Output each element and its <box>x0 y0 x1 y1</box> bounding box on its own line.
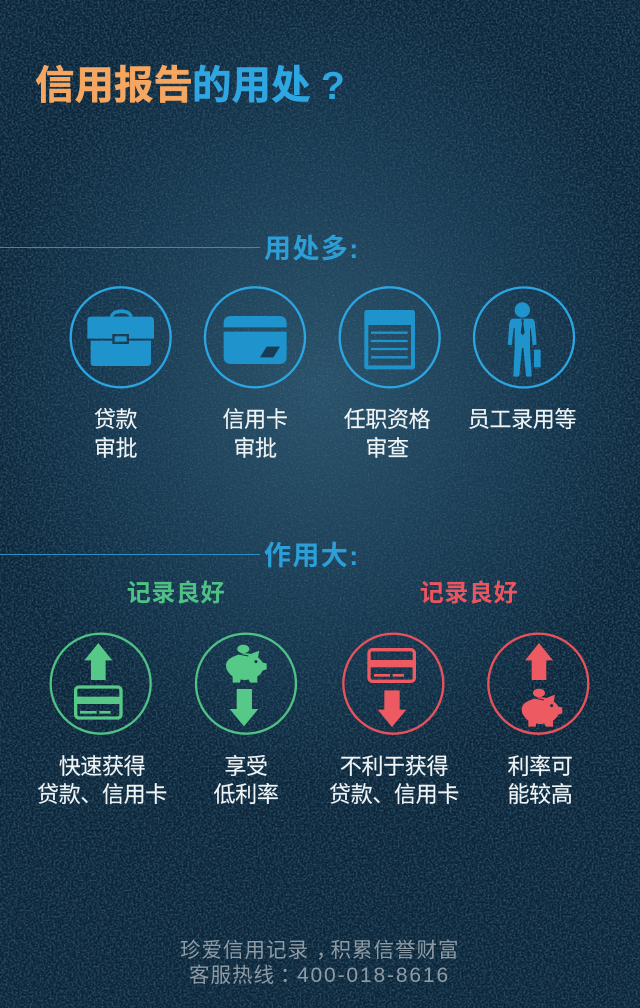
label: 低利率 <box>214 782 278 807</box>
label: 利率可 <box>508 754 572 779</box>
icon: circle <box>474 288 574 388</box>
title: 信用报告 <box>35 64 193 108</box>
item: card approval <box>205 287 305 461</box>
label: 信用卡 <box>223 407 287 432</box>
icon: piggy bank and arrow down <box>196 634 296 734</box>
item: employees <box>468 288 576 432</box>
label: 审批 <box>233 436 277 461</box>
label: 审查 <box>365 436 409 461</box>
item: loan approval <box>71 287 171 461</box>
panel: effects of good record <box>37 634 296 807</box>
footer <box>180 939 460 987</box>
icon: card and arrow down <box>343 634 443 734</box>
label: 快速获得 <box>59 754 145 779</box>
title: 的用处 <box>192 64 310 108</box>
icon: arrow up and piggy bank <box>488 634 588 734</box>
item: low interest <box>196 634 296 807</box>
item: employment review <box>340 287 440 461</box>
icon: briefcase <box>71 287 171 387</box>
footer: 400-018-8616 <box>297 964 450 987</box>
panel: uses <box>71 287 576 461</box>
item: hard to get loans <box>329 634 459 807</box>
label: 享受 <box>224 754 268 779</box>
item: higher interest <box>488 634 588 807</box>
label: 不利于获得 <box>340 754 448 779</box>
title <box>35 64 345 108</box>
label: 贷款 <box>94 407 137 432</box>
icon: document <box>340 287 440 387</box>
label: 贷款、信用卡 <box>329 782 459 807</box>
label: 贷款、信用卡 <box>37 782 167 807</box>
heading: many uses: 用处多: <box>264 234 360 264</box>
heading: big effects: 作用大: <box>264 541 360 571</box>
label: 能较高 <box>508 782 572 807</box>
icon: bank card <box>205 287 305 387</box>
item: fast approval <box>37 634 167 807</box>
panel: effects of bad record <box>329 634 588 807</box>
icon: arrow up and card <box>51 634 151 734</box>
footer: 客服热线： <box>189 964 302 987</box>
footer: 珍爱信用记录 ，积累信誉财富 <box>180 939 460 962</box>
subheading: good record: 记录良好 <box>127 580 225 607</box>
subheading: bad record: 记录良好 <box>420 580 518 607</box>
label: 审批 <box>94 436 137 461</box>
title: ? <box>321 65 345 108</box>
label: 任职资格 <box>344 407 431 432</box>
icon: businessman <box>508 302 541 377</box>
label: 员工录用等 <box>468 407 576 432</box>
